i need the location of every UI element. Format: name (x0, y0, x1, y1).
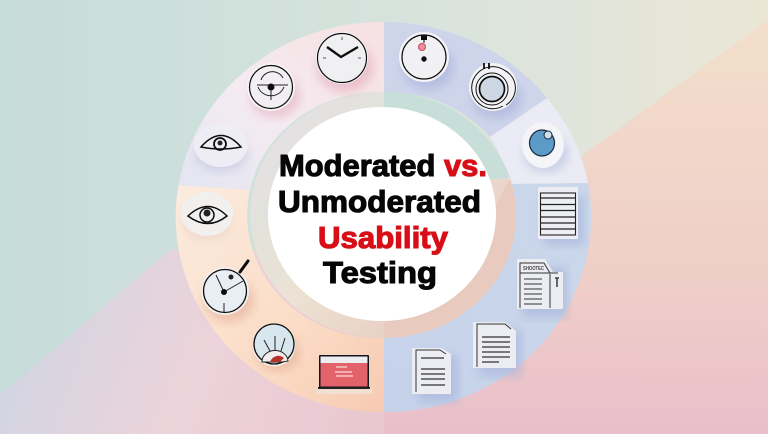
segment: bottom left peach (176, 185, 384, 412)
icon: eye two (181, 192, 233, 240)
title (278, 148, 487, 290)
icon: gauge dial with pointer (201, 261, 254, 322)
segment: bottom right blue (384, 183, 591, 412)
icon: blue lens (522, 122, 568, 172)
segment: top left pink (178, 22, 384, 190)
donut wheel (176, 22, 591, 412)
icon: laptop (316, 355, 372, 394)
icon: clock (316, 32, 373, 92)
title line 3: Usability (318, 220, 449, 255)
title line 2: Unmoderated (278, 184, 481, 219)
icon: form document (517, 259, 567, 317)
icon: ruled document (538, 187, 584, 245)
title line 1: Moderated vs. (279, 148, 487, 183)
title line 4: Testing (323, 255, 437, 290)
icon: document one (412, 348, 458, 402)
inner ring (250, 92, 516, 338)
icon: target dial (247, 63, 300, 118)
icon: timer (399, 32, 454, 90)
icon: half gauge (252, 324, 300, 371)
center white circle (268, 107, 496, 321)
icon: eye one (194, 123, 248, 172)
icon: document two (473, 322, 521, 376)
segment: right pale grey (490, 98, 588, 184)
segment: top right lavender (384, 22, 547, 137)
icon: spiral dial (469, 63, 522, 119)
form label: SHOOTEC (523, 266, 544, 272)
